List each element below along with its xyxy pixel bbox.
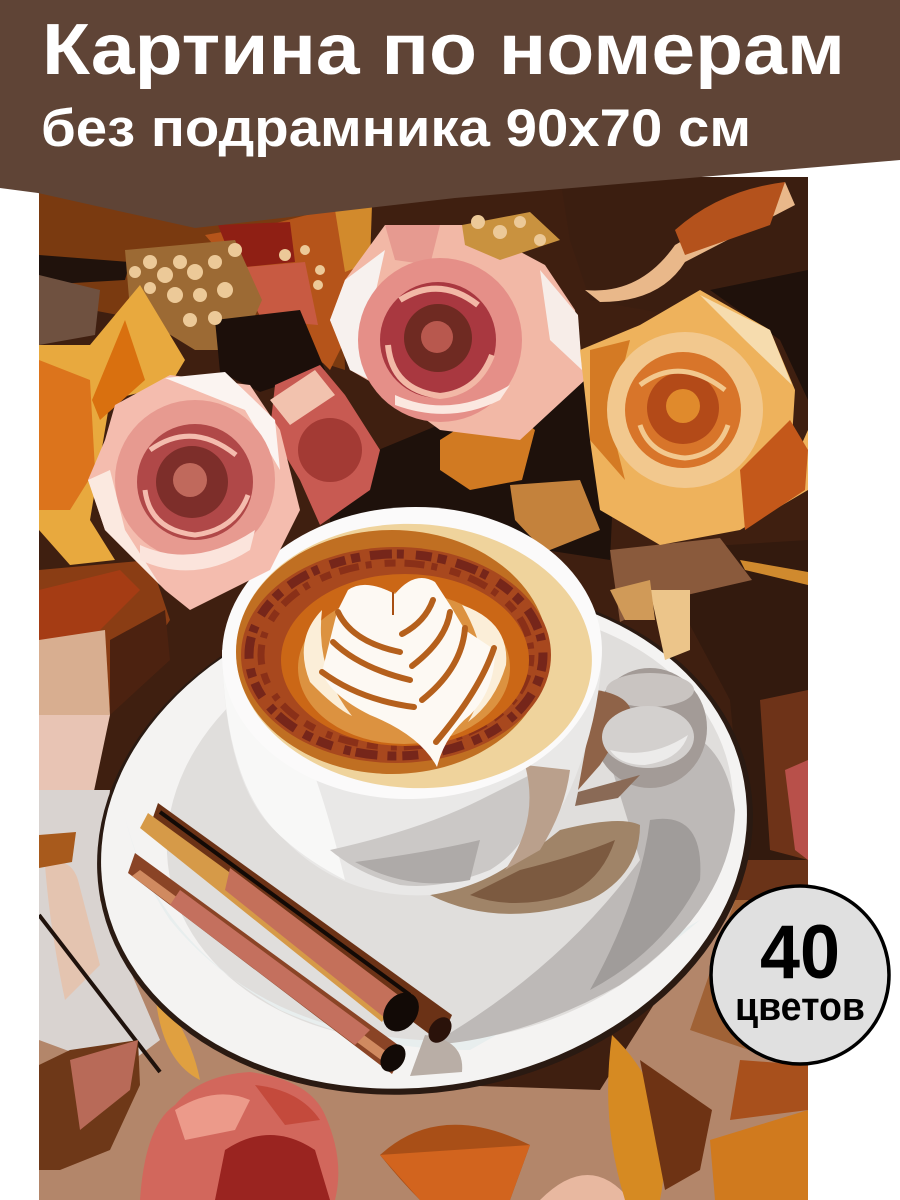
rose: pink top centre (330, 212, 585, 440)
rose: pink left (88, 372, 300, 610)
coffee with latte art (229, 515, 599, 797)
rosetta wings (304, 610, 352, 716)
cup body (217, 500, 607, 895)
banner title: Картина по номерам (42, 10, 845, 90)
dried flower right of cup (610, 538, 808, 660)
flower: small red pink (270, 365, 380, 525)
painting: coffee and roses (39, 177, 808, 1200)
ground under saucer (39, 898, 808, 1200)
cup handle (575, 668, 707, 806)
badge: 40 colours (711, 886, 889, 1064)
badge number: 40 (760, 910, 840, 995)
banner subtitle: без подрамника 90х70 см (41, 99, 751, 158)
rose: orange right (580, 290, 808, 545)
crema (229, 515, 599, 797)
rosetta (322, 578, 495, 767)
banner (0, 0, 900, 228)
cinnamon sticks (128, 803, 456, 1077)
saucer (97, 611, 753, 1095)
painting background (39, 188, 808, 1090)
badge label: цветов (735, 985, 865, 1029)
background leaves (39, 177, 808, 1200)
dried flower sprigs (129, 243, 325, 327)
rose: orange left (39, 285, 185, 565)
flower: bottom red carnation (140, 1072, 338, 1200)
